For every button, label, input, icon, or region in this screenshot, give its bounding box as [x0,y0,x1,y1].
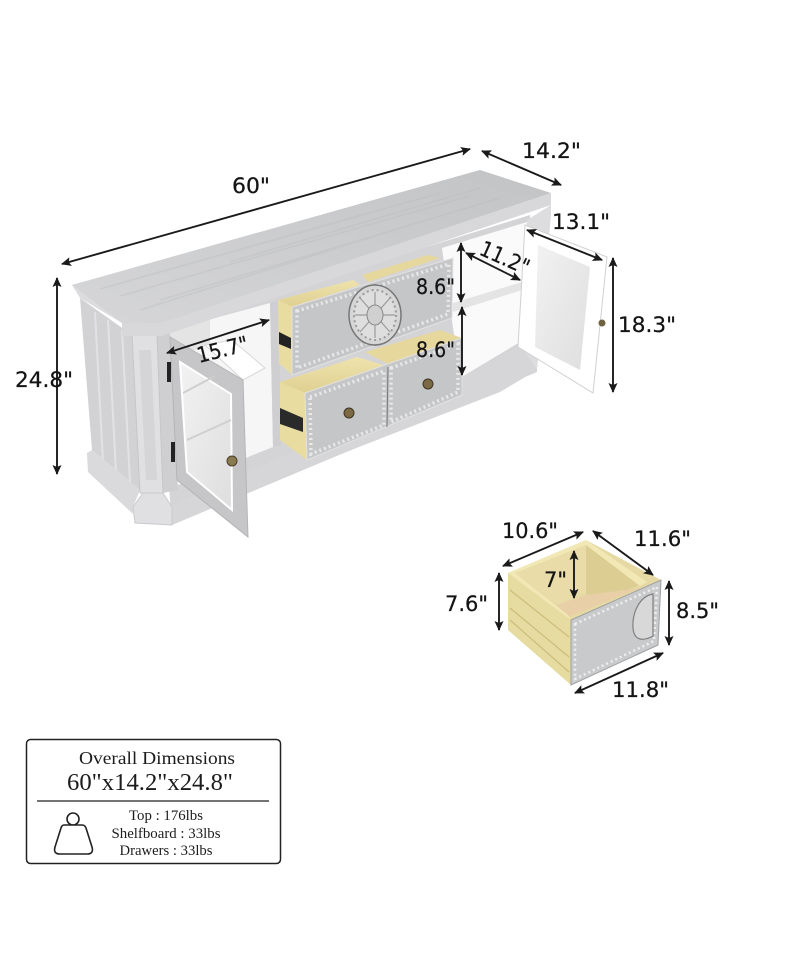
arrow: 7.6 inch [498,573,500,630]
label: lower 8.6 inch: 8.6" [416,338,455,363]
dimension arrows [57,149,669,693]
label: 18.3 inch: 18.3" [618,313,676,338]
left open door [167,337,248,537]
label: 10.6 inch: 10.6" [502,519,558,544]
heading: overall dimensions: Overall Dimensions [79,748,235,768]
drawer rim [508,540,647,620]
arrow: lower 8.6 inch [461,307,463,375]
drawer knob left [344,408,354,418]
label: 8.5 inch: 8.5" [676,599,719,624]
drawer illustration [508,540,661,685]
icon: weight [55,813,92,854]
right open door [518,225,607,393]
lower left drawer box [280,357,390,460]
label: 7 inch: 7" [544,568,567,593]
upper right drawer box [362,255,440,282]
arrow: 18.3 inch [612,258,614,392]
table top [72,170,551,336]
arrow: 24.8 inch [56,278,58,474]
half rosette [633,594,653,639]
arrow: 14.2 inch [482,151,561,185]
drawer floor [557,588,640,617]
label: 11.8 inch: 11.8" [612,678,669,703]
lower drawer fronts [305,338,462,460]
label: 15.7 inch: 15.7" [194,332,251,369]
arrow: upper 8.6 inch [460,243,462,302]
left frame strip [157,333,178,493]
label: 7.6 inch: 7.6" [445,592,488,617]
drawer interior back faces [515,545,586,605]
right plinth [172,346,537,525]
right cabinet interior [442,222,527,378]
drawer knob right [423,379,433,389]
arrow: 10.6 inch [503,532,583,566]
corner column [132,335,172,525]
dimension labels [15,139,719,703]
label: 13.1 inch: 13.1" [552,210,610,235]
label: 60 inch: 60" [232,174,270,199]
label: 11.6 inch: 11.6" [634,527,691,552]
center divider [270,300,281,447]
TV stand illustration [72,170,607,537]
label: 14.2 inch: 14.2" [522,139,581,164]
label: upper 8.6 inch: 8.6" [416,275,455,300]
arrow: 11.6 inch [593,531,653,575]
weight: drawers: Drawers : 33lbs [120,843,213,859]
label: 11.2 inch: 11.2" [476,237,533,281]
weight: shelfboard: Shelfboard : 33lbs [112,826,221,842]
arrow: 7 inch [573,551,575,598]
arrow: 8.5 inch [668,581,670,645]
panel: overall dimensions [26,740,280,864]
arrow: 60 inch [62,149,470,264]
arrow: 11.2 inch [466,253,520,280]
drawer interior base [508,540,661,620]
drawer front [571,580,661,685]
lower right drawer box [365,330,462,365]
door knob [227,456,237,466]
rosette ornament [349,285,401,345]
left cabinet interior [160,303,273,487]
side panel [80,298,140,490]
upper drawer fronts [292,258,453,375]
arrow: 11.8 inch [575,653,663,693]
weight: top: Top : 176lbs [129,808,203,824]
label: 24.8 inch: 24.8" [15,368,73,393]
arrow: 13.1 inch [527,230,602,260]
arrow: 15.7 inch [167,320,269,353]
front body background [157,215,537,525]
drawer side [508,573,571,685]
overall size: 60"x14.2"x24.8" [67,769,233,796]
upper left drawer box [278,280,360,375]
side plinth [87,450,140,514]
left shelf [205,340,265,380]
door knob [598,320,606,326]
